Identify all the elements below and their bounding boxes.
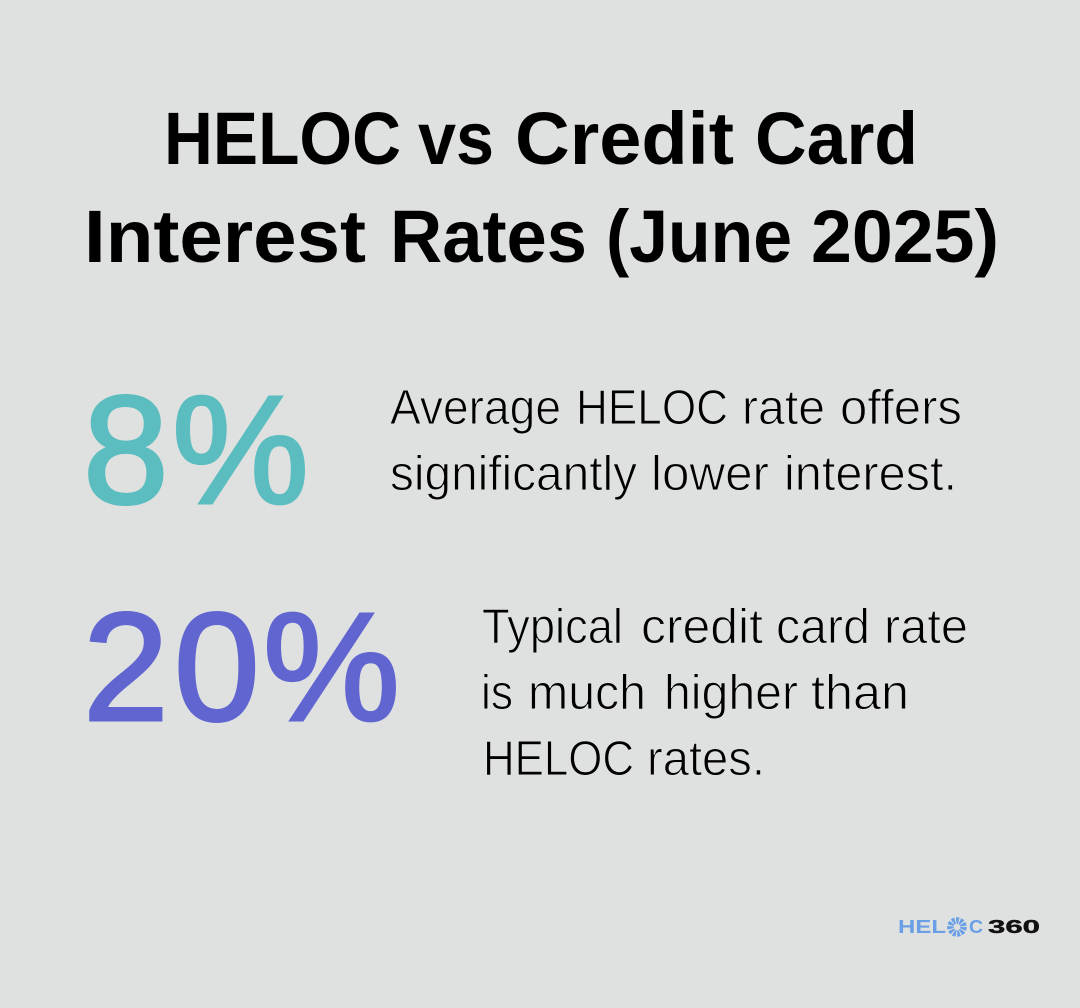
stat: credit card rate 20% — [83, 581, 968, 786]
stat description: credit card rate: higher — [664, 666, 798, 720]
stat description: HELOC rate: lower — [651, 447, 769, 501]
title: Card — [755, 97, 918, 180]
logo: HELOC360: 360 — [988, 917, 1040, 937]
stat description: credit card rate: than — [811, 666, 909, 720]
stat description: HELOC rate: Average — [390, 381, 561, 435]
stat description: HELOC rate: significantly — [390, 447, 637, 501]
stat description: credit card rate: much — [528, 666, 646, 720]
stat number: 8%: 8% — [83, 364, 309, 536]
title: (June — [606, 195, 792, 278]
title: HELOC — [164, 97, 401, 180]
stat description: credit card rate: rates. — [647, 732, 765, 786]
stat description: credit card rate: card — [776, 600, 870, 654]
stat description: HELOC rate: interest. — [784, 447, 957, 501]
stat description: credit card rate: Typical — [482, 600, 623, 654]
icon: swirl O — [950, 920, 964, 934]
title: vs — [418, 97, 494, 180]
logo: HELOC360: C — [969, 917, 983, 937]
stat description: HELOC rate: rate — [742, 381, 825, 435]
stat description: HELOC rate: HELOC — [576, 381, 728, 435]
title: Interest — [84, 195, 366, 278]
stat number: 20%: 20% — [83, 581, 400, 753]
stat description: HELOC rate: offers — [840, 381, 962, 435]
stat description: credit card rate: rate — [884, 600, 968, 654]
stat description: credit card rate — [481, 600, 968, 786]
stat description: HELOC rate — [390, 381, 962, 501]
stat description: credit card rate: credit — [641, 600, 763, 654]
stat description: credit card rate: is — [481, 666, 513, 720]
logo: HELOC360 — [898, 917, 1040, 937]
logo: HELOC360: HEL — [898, 917, 946, 937]
stat: HELOC rate 8% — [83, 364, 962, 536]
stat description: credit card rate: HELOC — [483, 732, 634, 786]
title: Rates — [390, 195, 587, 278]
title: Credit — [515, 97, 734, 180]
title: 2025) — [811, 195, 999, 278]
title — [84, 97, 999, 278]
